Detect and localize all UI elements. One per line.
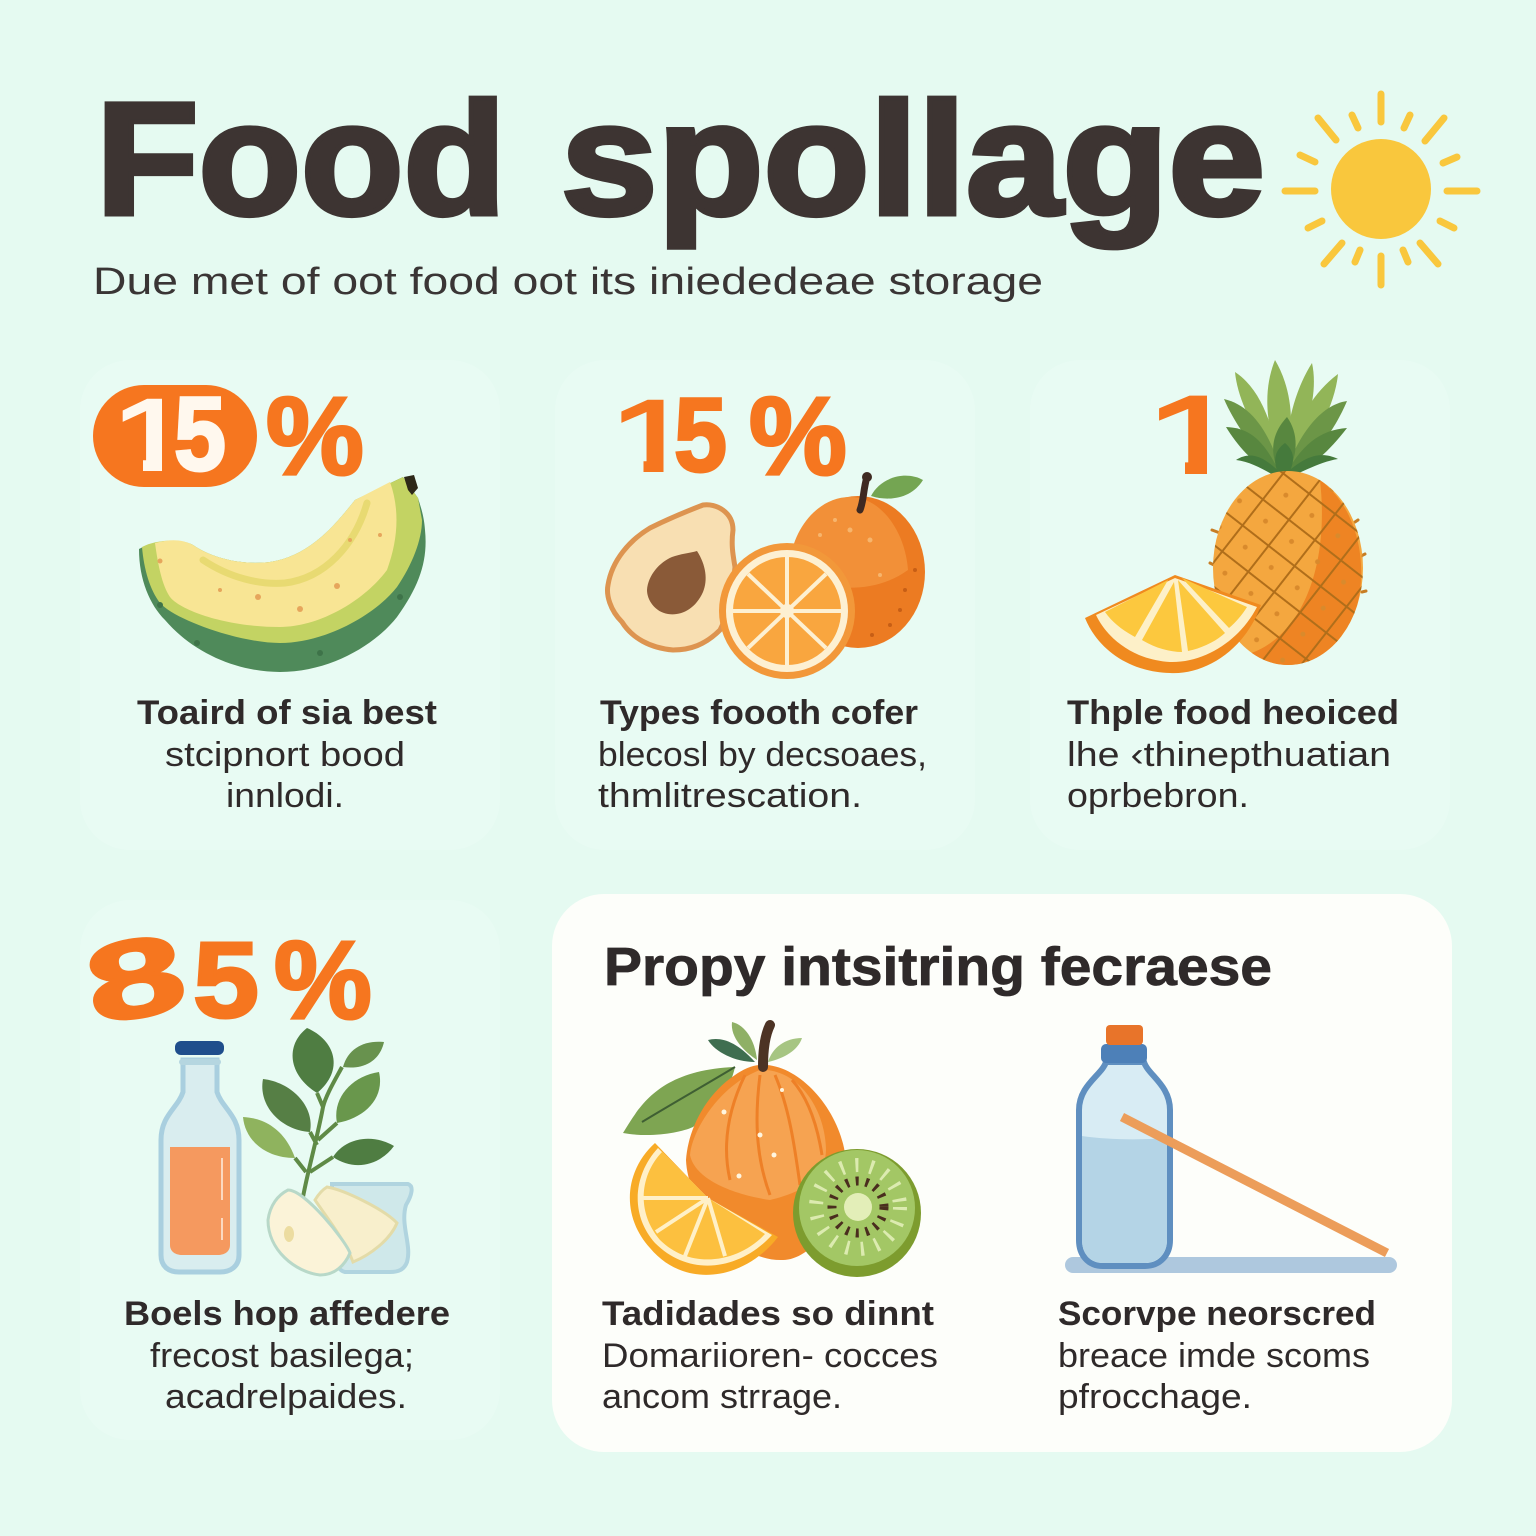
title: Food [96, 69, 506, 248]
caption: Boels hop affedere [124, 1295, 450, 1333]
stat: 15% badge: % [266, 375, 364, 498]
stat: 15% badge: 5 [174, 376, 226, 493]
stat: 15%: 5 [674, 377, 727, 494]
stat: 15% badge: 1 [113, 377, 192, 494]
stat: 85% [77, 910, 372, 1048]
stat: 85%: 5 [193, 919, 259, 1040]
caption [598, 694, 927, 815]
icon: orange with leaves [623, 1022, 846, 1260]
caption: lhe ‹thinepthuatian [1067, 736, 1391, 774]
panel: fruit stat [598, 375, 927, 815]
caption: breace imde scoms [1058, 1337, 1370, 1375]
caption: thmlitrescation. [598, 777, 862, 815]
icon: banana [139, 475, 426, 672]
caption: pfrocchage. [1058, 1378, 1252, 1416]
caption: Toaird of sia best [137, 694, 437, 732]
subtitle: Due met of oot food oot its iniededeae storage [93, 261, 1043, 303]
title [96, 69, 1265, 248]
caption: Types foooth cofer [600, 694, 918, 732]
icon: orange slice [719, 543, 855, 679]
stat: 15% badge [93, 385, 362, 487]
heading: Propy intsitring fecraese [604, 937, 1272, 997]
stat: 15%: 1 [611, 377, 696, 494]
panel: storage tips [552, 894, 1452, 1452]
panel: pineapple stat [1067, 360, 1399, 815]
title: spollage [561, 69, 1265, 248]
caption [1058, 1295, 1376, 1416]
caption: Domariioren- cocces [602, 1337, 938, 1375]
caption: Tadidades so dinnt [602, 1295, 934, 1333]
stat: 85%: 8 [77, 910, 194, 1048]
icon: pineapple [1210, 360, 1366, 668]
caption: innlodi. [226, 777, 344, 815]
caption: acadrelpaides. [165, 1378, 407, 1416]
icon: lemon wedge [630, 1143, 778, 1275]
caption [602, 1295, 938, 1416]
caption [124, 1295, 450, 1416]
icon: orange whole [790, 472, 925, 648]
icon: bottle [161, 1041, 239, 1272]
panel: banana stat [93, 375, 437, 815]
panel: bottle stat [77, 910, 450, 1416]
caption: ancom strrage. [602, 1378, 842, 1416]
icon: sun [1285, 94, 1477, 285]
caption [1067, 694, 1399, 815]
caption: Thple food heoiced [1067, 694, 1399, 732]
caption: blecosl by decsoaes, [598, 736, 927, 774]
icon: plant [243, 1028, 394, 1197]
caption: oprbebron. [1067, 777, 1249, 815]
caption: stcipnort bood [165, 736, 405, 774]
caption: frecost basilega; [150, 1337, 414, 1375]
icon: water bottle and straw [1065, 1025, 1397, 1273]
stat: 15% [621, 396, 846, 476]
icon: kiwi [793, 1149, 921, 1277]
caption [137, 694, 437, 815]
icon: glass with garlic [268, 1184, 412, 1275]
stat: 15%: % [749, 375, 847, 498]
stat: 1: 1 [1147, 370, 1245, 499]
caption: Scorvpe neorscred [1058, 1295, 1376, 1333]
icon: halved fruit [608, 505, 735, 650]
stat: 85%: % [274, 919, 372, 1042]
icon: orange wedge [1085, 575, 1261, 673]
